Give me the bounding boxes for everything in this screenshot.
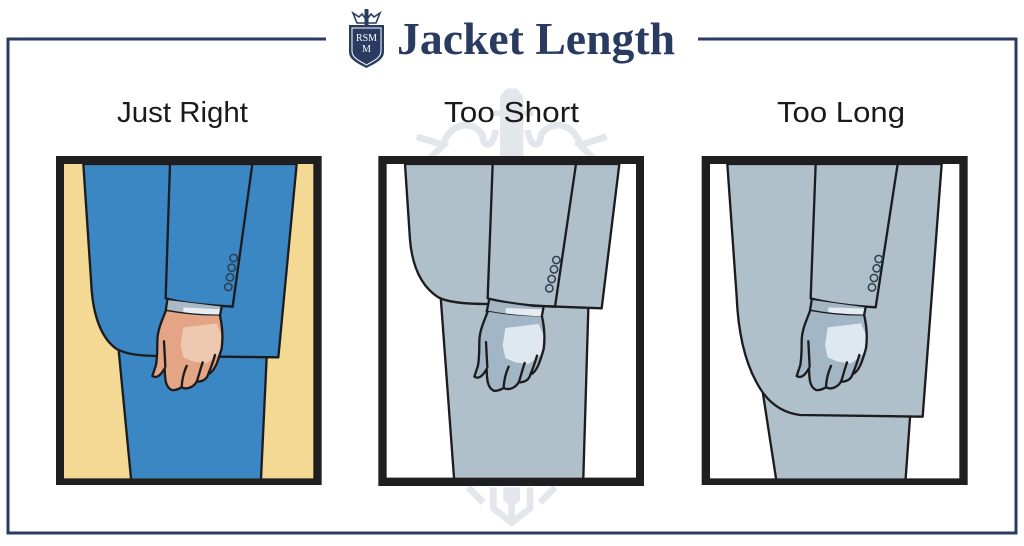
frame xyxy=(702,156,968,485)
heading: Too Short: Too Short xyxy=(444,97,579,129)
sleeve buttons xyxy=(225,254,237,291)
panel: too long xyxy=(702,156,968,485)
frame xyxy=(56,156,322,485)
title: Jacket Length xyxy=(397,14,675,64)
panel: just right xyxy=(56,156,322,485)
logo: RSM shield and crown: M xyxy=(362,44,371,55)
hand xyxy=(474,312,544,391)
trousers xyxy=(441,293,589,478)
jacket body xyxy=(405,164,619,308)
jacket body xyxy=(83,164,297,357)
shirt cuff xyxy=(487,301,543,318)
watermark crest xyxy=(417,88,607,523)
trousers xyxy=(762,388,911,478)
sleeve xyxy=(166,164,252,307)
sleeve xyxy=(811,164,898,307)
hand xyxy=(797,311,867,390)
sleeve xyxy=(488,164,576,307)
shirt cuff xyxy=(166,300,222,316)
logo: RSM shield and crown: RSM xyxy=(356,33,377,44)
hand xyxy=(152,311,222,390)
sleeve buttons xyxy=(868,255,882,291)
trousers xyxy=(118,343,267,478)
logo: RSM shield and crown xyxy=(349,9,384,68)
heading: Just Right: Just Right xyxy=(117,97,248,129)
frame xyxy=(378,156,644,486)
sleeve buttons xyxy=(546,256,560,292)
heading: Too Long: Too Long xyxy=(777,97,905,129)
jacket body xyxy=(727,164,942,417)
shirt cuff xyxy=(810,300,866,316)
panel: too short xyxy=(378,156,644,486)
